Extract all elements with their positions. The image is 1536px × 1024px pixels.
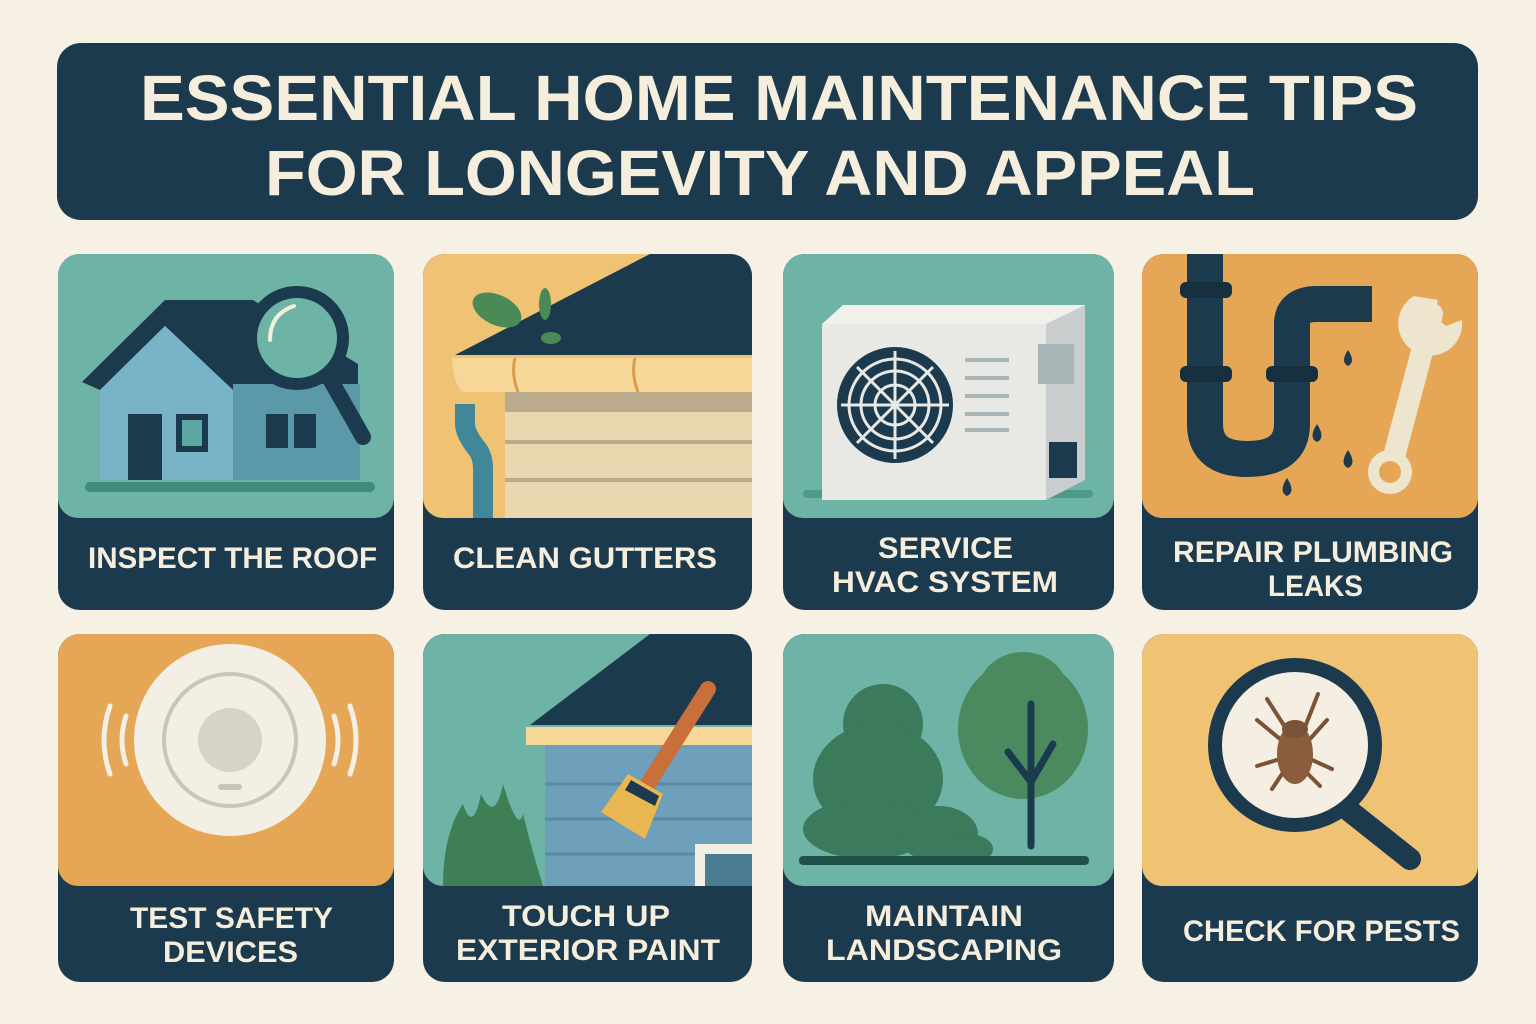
label: REPAIR PLUMBING bbox=[1173, 536, 1453, 569]
panel: inspect the roof bbox=[58, 254, 394, 610]
illustration: house wall with paintbrush bbox=[423, 634, 752, 886]
panel: test safety devices bbox=[58, 634, 394, 982]
panel: service hvac bbox=[783, 254, 1114, 610]
panel: repair plumbing bbox=[1142, 254, 1478, 610]
label: MAINTAIN bbox=[865, 900, 1023, 933]
panel: maintain landscaping: LANDSCAPING bbox=[826, 934, 1062, 967]
panel: repair plumbing: LEAKS bbox=[1268, 570, 1363, 603]
panel: service hvac: HVAC SYSTEM bbox=[832, 566, 1058, 599]
label: TEST SAFETY bbox=[130, 902, 333, 935]
title text: ESSENTIAL HOME MAINTENANCE TIPS bbox=[140, 62, 1418, 134]
panel: test safety devices: DEVICES bbox=[163, 936, 298, 969]
illustration: magnifier with bug bbox=[1142, 634, 1478, 886]
illustration: gutter and roof bbox=[423, 254, 752, 518]
label: SERVICE bbox=[878, 532, 1013, 565]
title text: FOR LONGEVITY AND APPEAL bbox=[265, 137, 1255, 209]
label: TOUCH UP bbox=[502, 900, 670, 933]
illustration: house with magnifier bbox=[58, 254, 394, 518]
label: CHECK FOR PESTS bbox=[1183, 915, 1460, 948]
panel: clean gutters bbox=[423, 254, 752, 610]
label: INSPECT THE ROOF bbox=[88, 542, 377, 575]
illustration: pipe and wrench bbox=[1142, 254, 1478, 518]
panel: check for pests bbox=[1142, 634, 1478, 982]
illustration: smoke detector bbox=[58, 634, 394, 886]
illustration: bush and tree bbox=[783, 634, 1114, 886]
title text bbox=[140, 62, 1418, 209]
panel: maintain landscaping bbox=[783, 634, 1114, 982]
label: CLEAN GUTTERS bbox=[453, 542, 717, 575]
title banner bbox=[57, 43, 1478, 220]
illustration: ac unit bbox=[783, 254, 1114, 518]
panel: touch up paint bbox=[423, 634, 752, 982]
panel: touch up paint: EXTERIOR PAINT bbox=[456, 934, 720, 967]
